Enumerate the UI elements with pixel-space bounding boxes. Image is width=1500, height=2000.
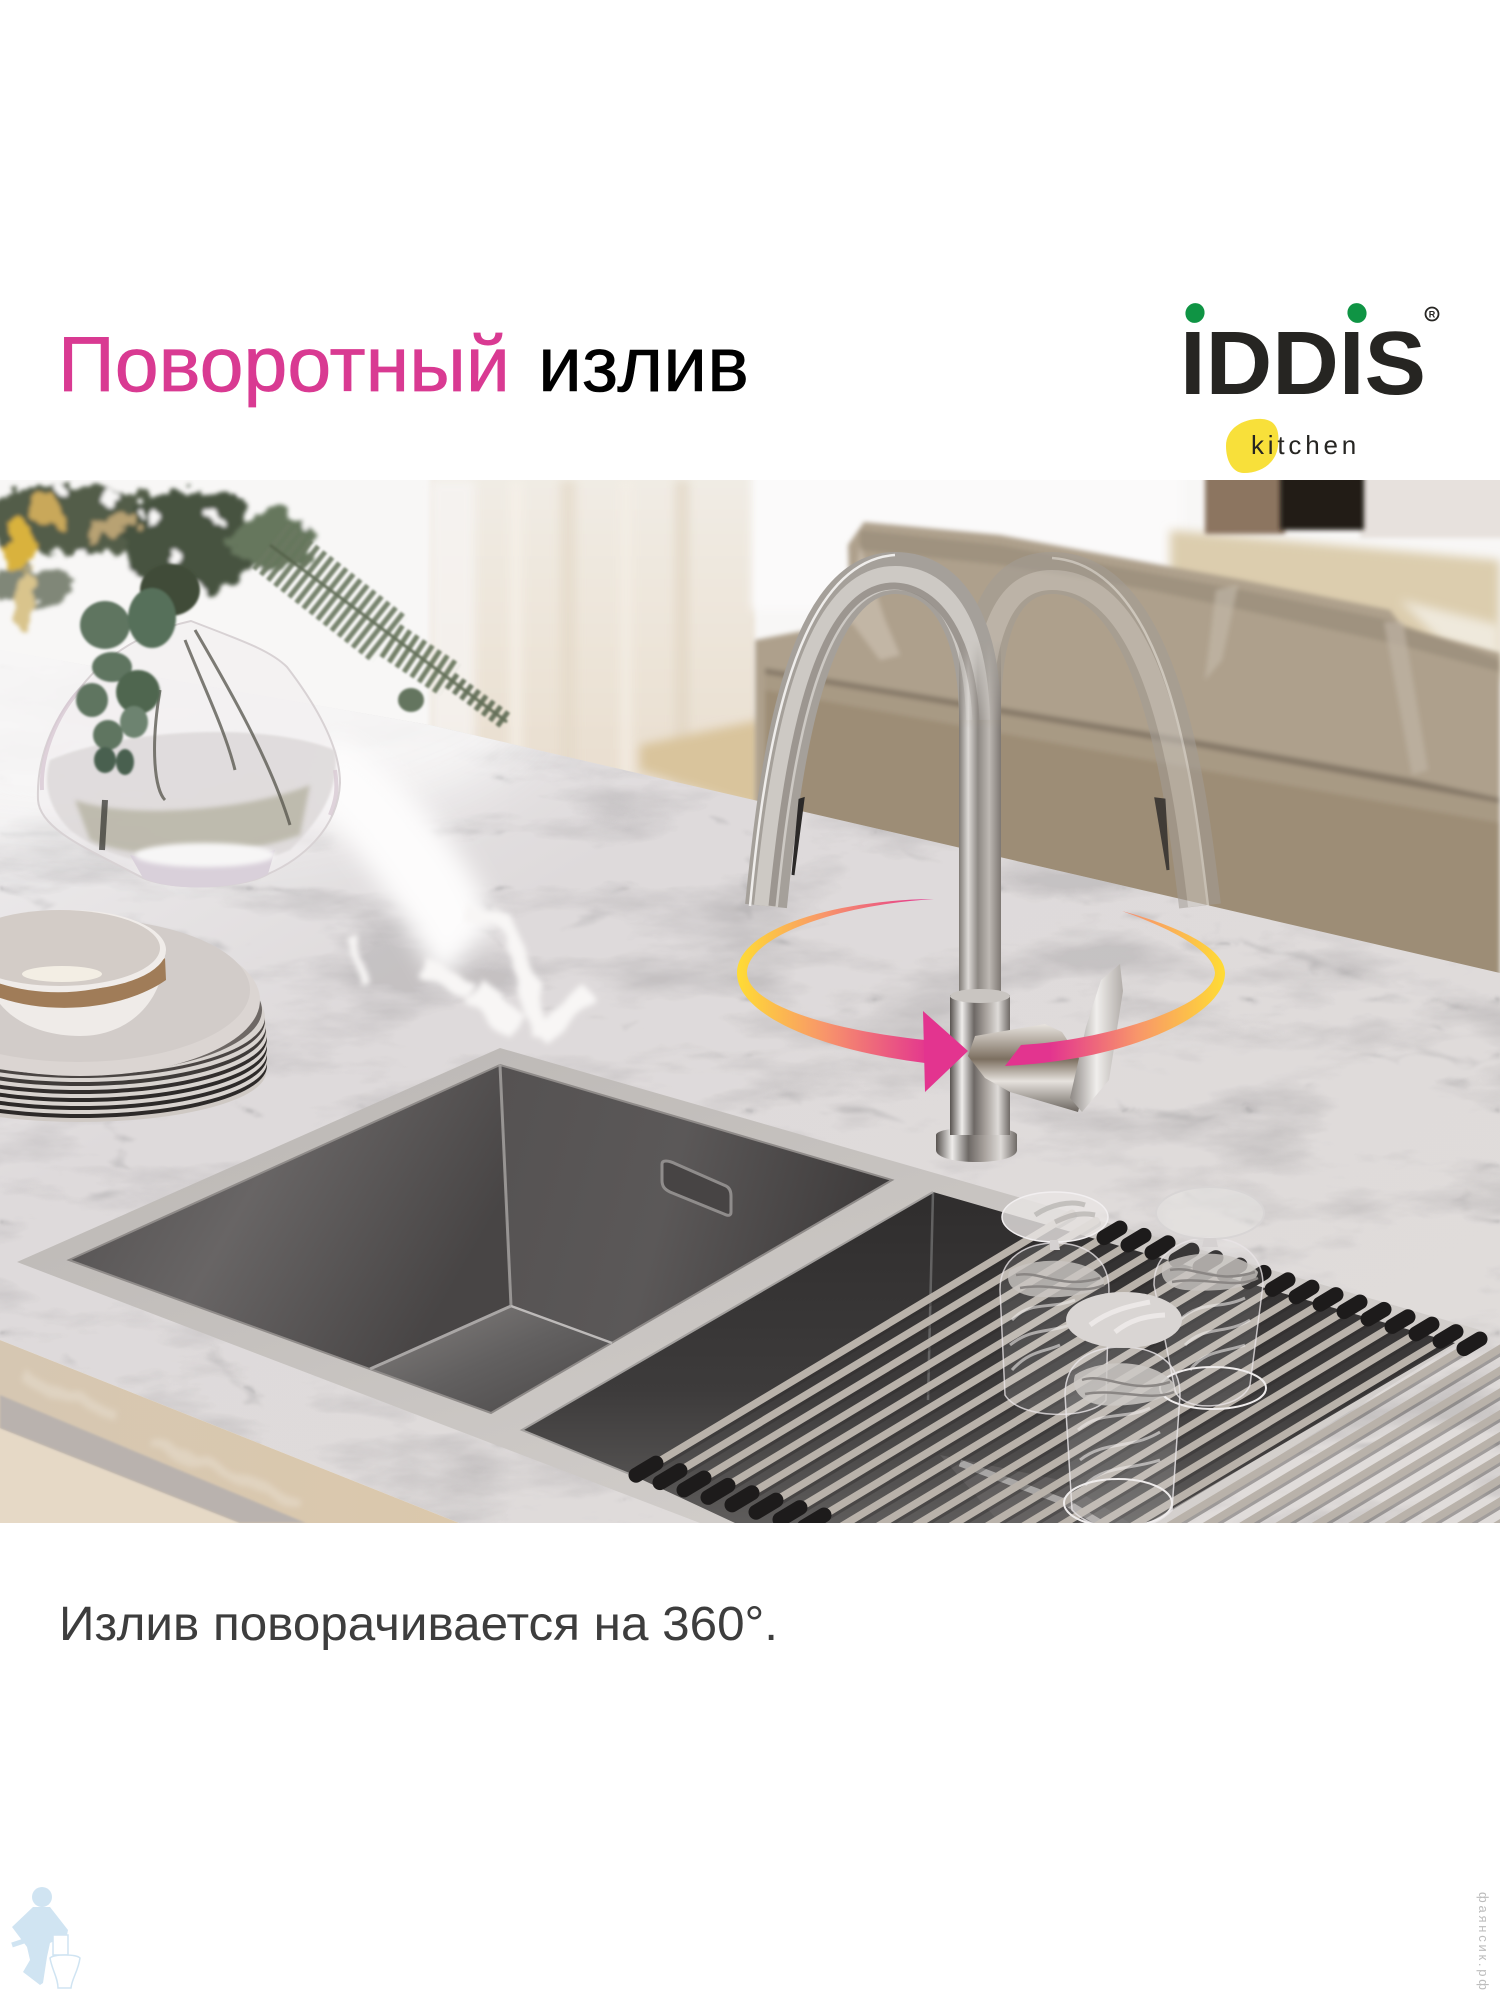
background: floor and dark object [1170, 470, 1500, 680]
plate stack [0, 918, 267, 1122]
plant foliage [0, 481, 507, 775]
photo: kitchen scene [0, 480, 1500, 1523]
sink rim [17, 1048, 1480, 1523]
left sink bowl [69, 1065, 892, 1413]
logo: IDDIS kitchen [1180, 300, 1438, 473]
drying rack [628, 1210, 1500, 1523]
logo: IDDIS kitchen: R [1429, 310, 1436, 320]
mixer lever [968, 1028, 1079, 1112]
sunlight streak and white marble veins [331, 770, 597, 1044]
logo: IDDIS kitchen: IDDIS [1180, 314, 1426, 414]
glass 1 [1000, 1192, 1109, 1414]
right sink bowl [522, 1192, 1455, 1523]
background: sofa [755, 522, 1500, 1010]
glass 3 [1064, 1292, 1182, 1529]
rack bars [660, 1210, 1500, 1523]
spout: rotated position (semi-transparent) [980, 558, 1208, 906]
marble countertop [0, 714, 1500, 1523]
overflow drain [662, 1161, 731, 1215]
watermark: vertical site name: фаянсик.рф [1476, 1892, 1491, 1990]
faucet stem [959, 640, 1001, 996]
rotation arrows [737, 899, 1225, 1092]
bowl [0, 910, 166, 1036]
plates and bowl [0, 910, 267, 1122]
counter side and cabinet [0, 1340, 459, 1523]
background: window and curtain [0, 480, 1500, 800]
left rotation arrow [737, 899, 968, 1092]
description text: Излив поворачивается на 360°. [59, 1598, 778, 1651]
logo: IDDIS kitchen: kitchen [1251, 430, 1360, 460]
fern frond [270, 545, 507, 722]
title: излив [538, 320, 749, 408]
title: Поворотный [58, 320, 510, 408]
glass 2 [1154, 1187, 1266, 1409]
spout: main position [750, 555, 980, 906]
mixer handle [1070, 964, 1123, 1112]
faucet [750, 555, 1208, 1162]
faucet base [936, 989, 1017, 1162]
rack black end caps [636, 1228, 1480, 1527]
right rotation arrow [1005, 911, 1225, 1066]
title [58, 320, 749, 408]
glass vase [38, 621, 340, 887]
watermark: plumber icon [12, 1887, 80, 1988]
